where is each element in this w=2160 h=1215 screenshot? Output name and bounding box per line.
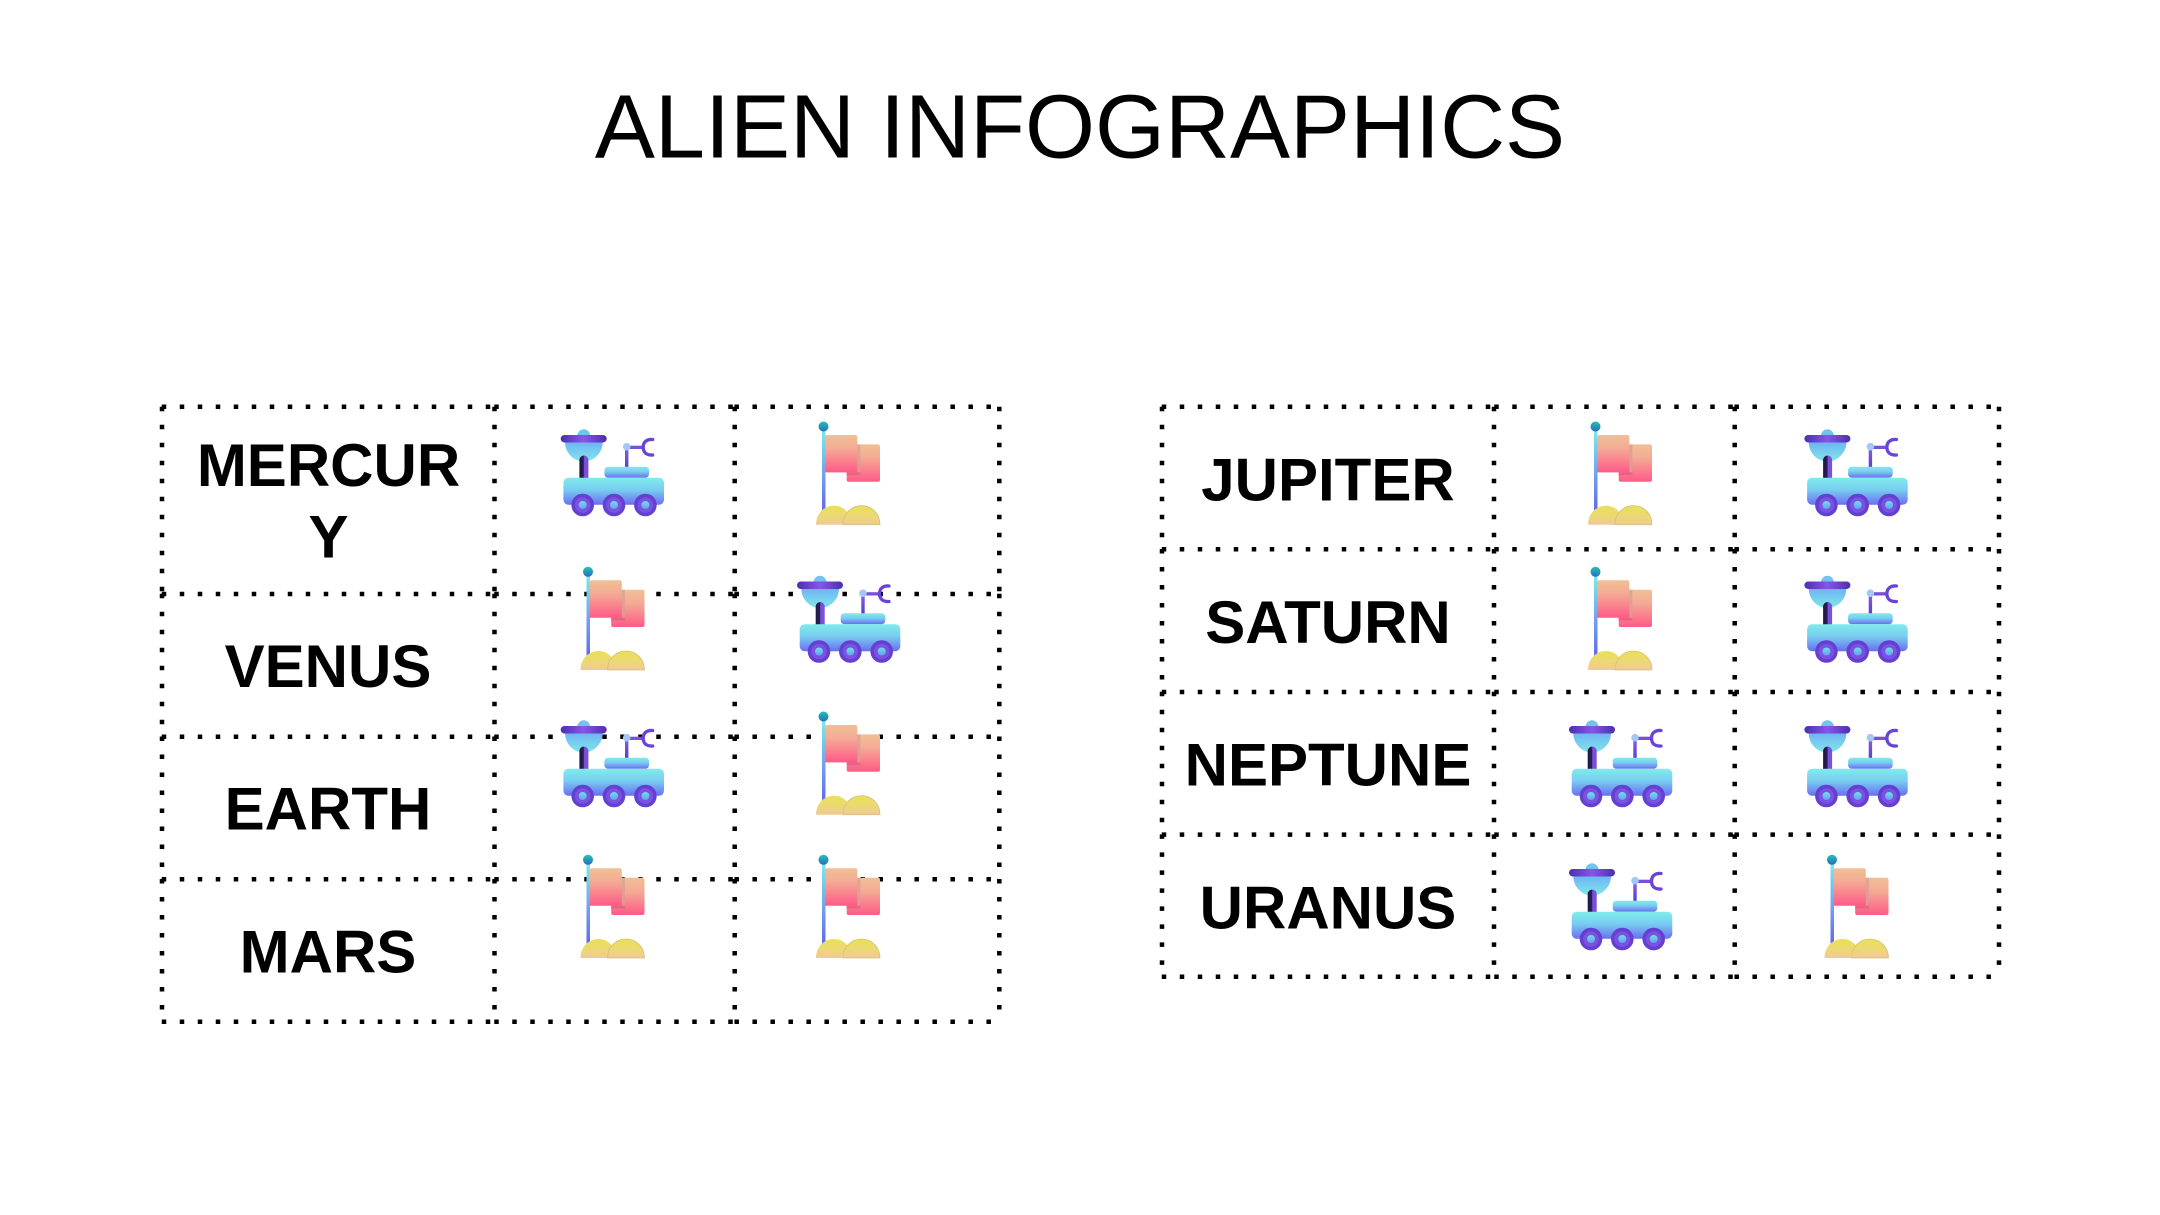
- label: Mars: MARS: [240, 918, 416, 986]
- icon: Mars flag 1: [580, 855, 644, 958]
- icon: Mercury rover: [561, 429, 664, 516]
- label: Neptune: NEPTUNE: [1185, 731, 1471, 798]
- label: Saturn: SATURN: [1205, 589, 1451, 656]
- icon: Mars flag 2: [816, 855, 880, 958]
- table grid: left: [162, 407, 999, 1022]
- icon: Earth flag: [816, 712, 880, 815]
- icon: Neptune rover 2: [1804, 720, 1908, 807]
- icon: Saturn flag: [1588, 567, 1652, 670]
- panel: right table: [1162, 407, 1999, 977]
- icon: Saturn rover: [1804, 576, 1908, 663]
- icon: Venus flag: [580, 567, 644, 670]
- icon: Jupiter flag: [1588, 422, 1652, 525]
- icon: Earth rover: [561, 720, 664, 807]
- label: Jupiter: JUPITER: [1201, 446, 1455, 513]
- label: Earth: EARTH: [225, 776, 431, 843]
- label: Uranus: URANUS: [1200, 874, 1456, 941]
- label: Mercury: MERCUR: [197, 432, 460, 499]
- table grid: right: [1162, 407, 1999, 977]
- label: Venus: VENUS: [225, 633, 431, 700]
- icon: Venus rover: [797, 576, 900, 663]
- icon: Jupiter rover: [1804, 429, 1908, 516]
- icon: Uranus rover: [1569, 863, 1672, 950]
- panel: left table: [162, 407, 999, 1022]
- icon: Mercury flag: [816, 422, 880, 525]
- label: Mercury: Y: [308, 504, 349, 570]
- icon: Neptune rover 1: [1569, 720, 1672, 807]
- title: ALIEN INFOGRAPHICS: [595, 78, 1565, 178]
- icon: Uranus flag: [1824, 855, 1888, 958]
